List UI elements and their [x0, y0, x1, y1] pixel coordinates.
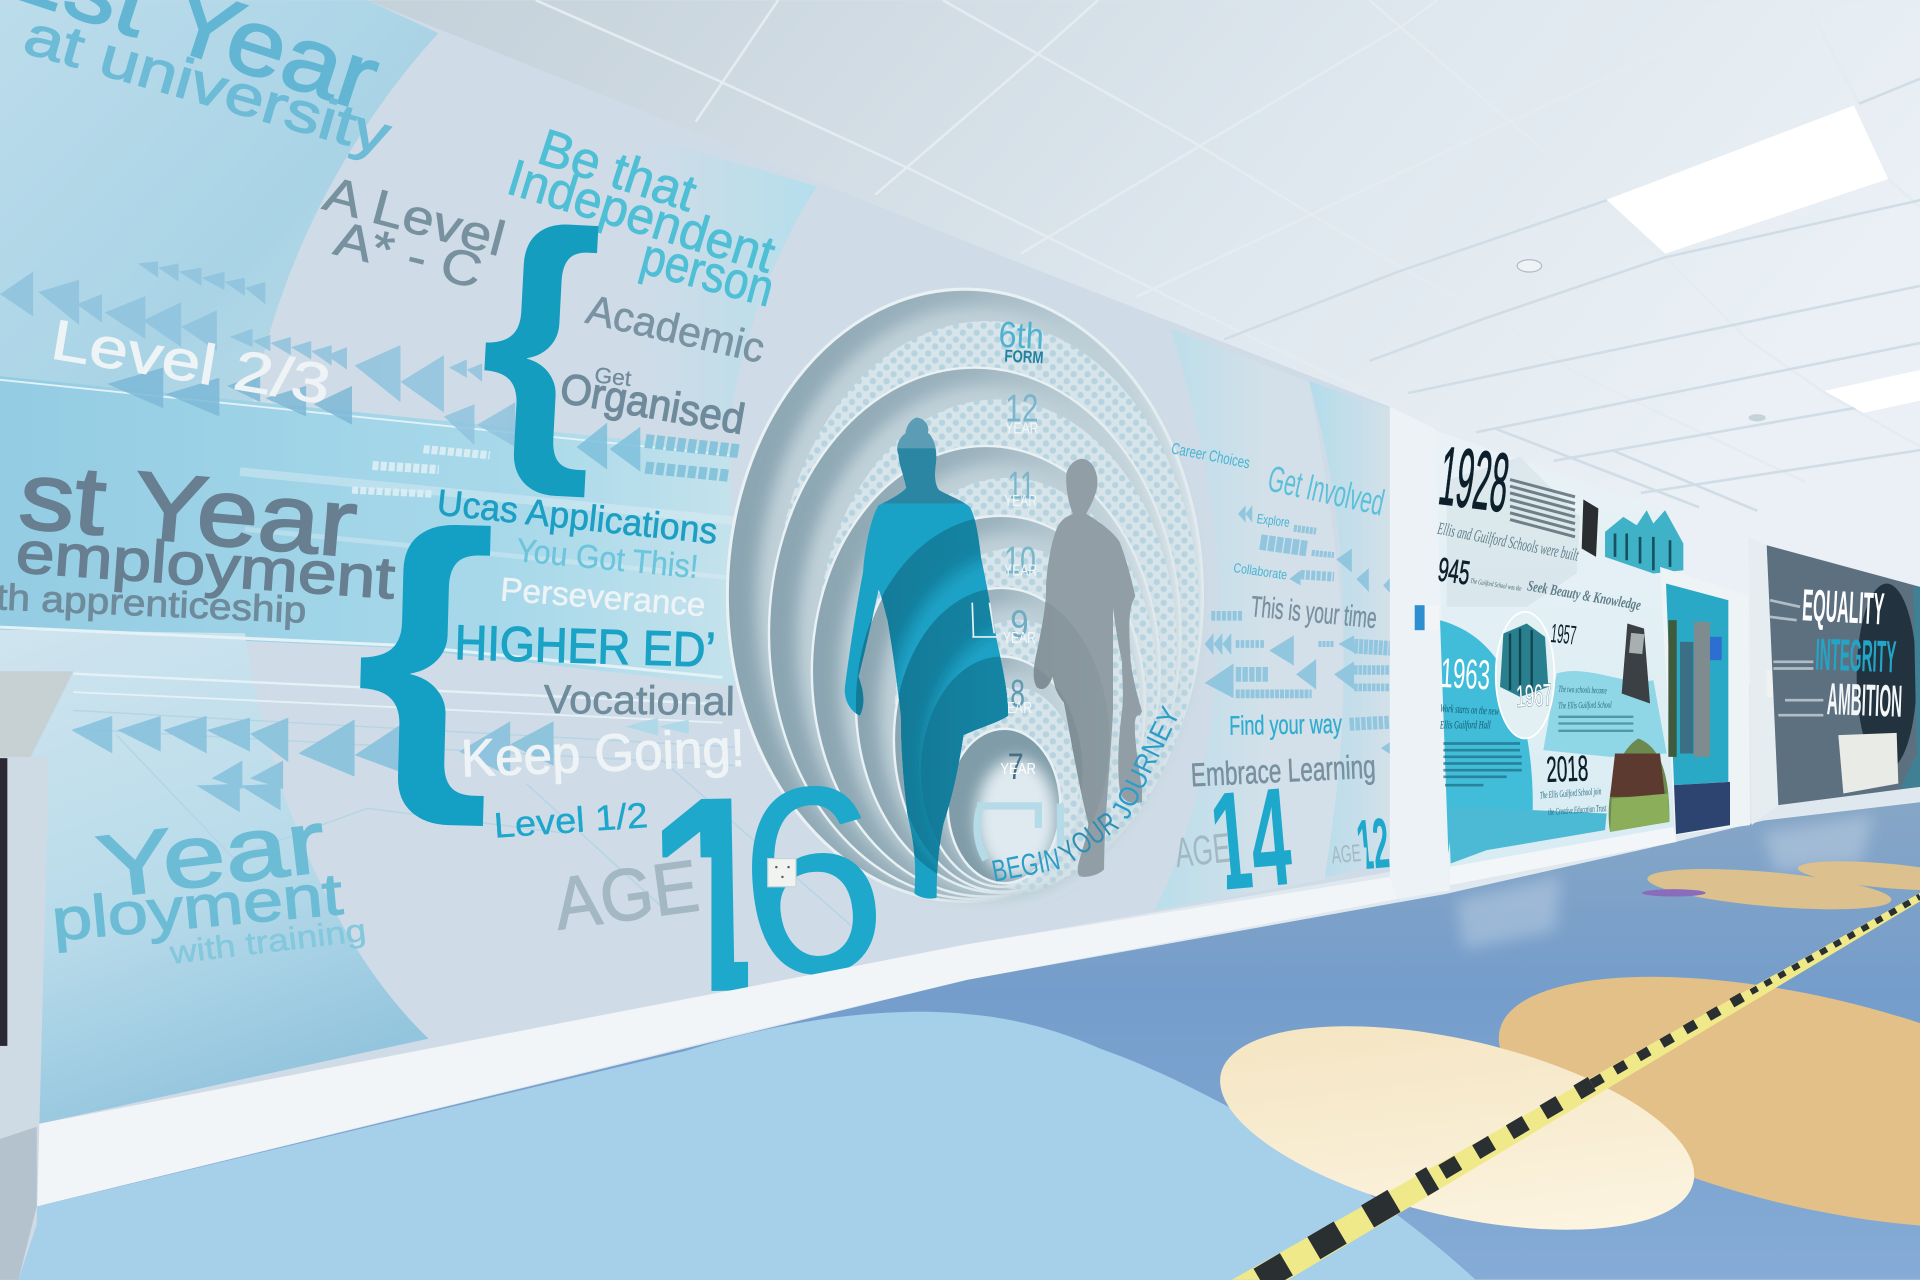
right blue band A [1155, 328, 1343, 910]
begin your journey curved label: BEGIN [989, 842, 1063, 889]
history wall panel [1435, 430, 1673, 867]
work starts caption [1439, 703, 1499, 732]
concentric journey circle [727, 289, 1202, 901]
level 2/3: Level 2/3 [47, 307, 335, 416]
academic: Academic [582, 285, 769, 372]
seek beauty motto: Seek Beauty & Knowledge [1526, 577, 1642, 614]
floor sticker [1642, 889, 1706, 897]
year 8 label: 8 [1010, 673, 1025, 716]
heading: year employment with training: Year [92, 791, 330, 917]
work starts caption: Ellis Guilford Hall [1439, 720, 1491, 732]
ring 3 year 11 [812, 446, 1160, 897]
main mural wall [0, 0, 1390, 1133]
year 7 label [1000, 746, 1036, 787]
A level grades: A* - C [329, 212, 487, 299]
ring 1 sixth form [727, 289, 1202, 901]
pillar between walls [1390, 407, 1450, 899]
history wall and far corridor: 1928 [1435, 429, 1514, 530]
joins trust caption: the Creative Education Trust [1548, 803, 1607, 818]
heading: year employment with training [49, 791, 368, 971]
age 12: AGE [1330, 840, 1362, 869]
heading: 1st year at university [0, 0, 398, 167]
ceiling sprinkler far [1749, 414, 1766, 421]
ghost letters in centre [977, 803, 1060, 860]
floor tan shape right [1476, 927, 1920, 1277]
two schools caption: The two schools became [1558, 685, 1607, 697]
dark circle on values wall [1857, 584, 1917, 770]
be that independent person [501, 117, 782, 318]
heading: 1st year employment with apprenticeship: employment [14, 520, 397, 611]
year 12 label: 12 [1005, 387, 1038, 430]
age 16: 6 [724, 724, 899, 1036]
6th form label: 6th [998, 314, 1045, 357]
wall socket [768, 859, 796, 887]
joins trust caption: The Ellis Guilford School join [1539, 786, 1602, 801]
level 1/2: Level 1/2 [492, 795, 649, 846]
door frame [1660, 567, 1750, 835]
begin your journey curved label [989, 702, 1186, 889]
year 10 label: YEAR [1004, 563, 1037, 580]
vocational: Vocational [544, 676, 735, 724]
year 9 label [1003, 603, 1036, 647]
year 9 label: 9 [1010, 603, 1029, 646]
two schools caption: The Ellis Guilford School [1558, 700, 1612, 712]
joins trust caption [1539, 786, 1607, 818]
perseverance: Perseverance [499, 571, 707, 624]
teal panel lower left [1440, 620, 1533, 854]
building engraving [1605, 510, 1683, 574]
find your way: Find your way [1229, 709, 1342, 741]
right mural chevrons [1205, 505, 1394, 757]
teal wash middle [1543, 671, 1667, 757]
work starts caption: Work starts on the new [1440, 703, 1499, 718]
year 11 label: YEAR [1004, 493, 1037, 510]
silhouette: man [1034, 458, 1142, 877]
floor reflections [1457, 814, 1873, 949]
year 8 label [998, 673, 1032, 717]
career choices: Career Choices [1170, 441, 1251, 472]
year 7 label: 7 [1008, 746, 1024, 787]
be that independent person: Be that [532, 117, 703, 222]
text: 12 [1354, 804, 1392, 886]
ring 5 year 9 [894, 588, 1109, 892]
be that independent person: Independent [501, 148, 782, 284]
ceiling light panel far [1824, 370, 1920, 413]
caption 1945: The Guilford School was the [1470, 576, 1523, 593]
A level grades [318, 167, 511, 299]
get involved: Get Involved [1264, 458, 1388, 523]
numerals fourteen: 14 [1205, 758, 1297, 920]
floor [0, 802, 1920, 1280]
get organised: Organised [557, 364, 748, 444]
dark door edge [0, 758, 7, 1046]
teal wash bottom [1448, 807, 1607, 864]
portrait photo [1582, 500, 1598, 557]
year 10 label: 10 [1004, 539, 1036, 582]
ring 4 year 10 [856, 516, 1145, 893]
lower left blue panel [0, 630, 429, 1133]
chevron arrows left lower [71, 716, 689, 812]
woman hanging strap detail [972, 603, 997, 637]
teal strip right [1900, 587, 1920, 789]
left mural text [0, 0, 899, 1052]
A level grades: A Level [318, 167, 511, 267]
circular building photo [1496, 612, 1554, 739]
silhouette: woman [844, 418, 1008, 899]
values wall small quotes [1770, 600, 1823, 715]
two schools caption [1558, 685, 1612, 712]
higher ed: HIGHER ED’ [454, 616, 716, 678]
blue panel top left [0, 0, 438, 466]
grey values wall [1767, 545, 1920, 805]
age 16: AGE [549, 844, 704, 945]
year 7 label: YEAR [1000, 761, 1036, 778]
year 8 label: YEAR [998, 700, 1032, 717]
history wall skirting [1450, 827, 1677, 885]
woman ring shading [856, 518, 1008, 874]
right blue band B [1309, 381, 1390, 877]
upper curly brace: { [473, 168, 608, 501]
door safety sign strip [1415, 605, 1439, 630]
door teal [1666, 584, 1728, 785]
ucas applications: Ucas Applications [435, 482, 719, 552]
year 9 label: YEAR [1003, 630, 1036, 647]
round photo of school [1609, 739, 1669, 832]
blue band behind independent person [637, 137, 817, 423]
skirting board main wall [37, 877, 1397, 1206]
6th form label: FORM [1004, 345, 1044, 367]
date 2018: 2018 [1546, 747, 1589, 790]
left column and trim [0, 671, 73, 1280]
date 1963: 1963 [1440, 649, 1491, 698]
floor beige ellipse far [1646, 861, 1893, 917]
keep going: Keep Going! [460, 719, 746, 789]
ghost map texture [1447, 457, 1580, 607]
ring 7 year 7 [948, 729, 1060, 883]
woman upper muted zone [897, 418, 936, 448]
paragraph 1928 [1510, 480, 1575, 537]
door windows [1668, 620, 1710, 757]
date 1967: 1967 [1515, 678, 1553, 714]
woman neck shading [882, 448, 965, 504]
get organised: Get [593, 362, 633, 391]
ceiling light panel near [1607, 106, 1888, 254]
date 1945: 945 [1436, 551, 1472, 593]
age 14: AGE [1173, 824, 1232, 876]
1967 paragraph [1558, 717, 1633, 731]
1963 paragraph [1443, 744, 1522, 785]
hazard tape [1232, 893, 1920, 1280]
radiator [1838, 733, 1898, 794]
explore: Explore [1256, 511, 1291, 530]
hand gel dispenser [1767, 670, 1778, 697]
age 16 [558, 786, 876, 991]
ring 2 year 12 [769, 368, 1180, 899]
year 11 label: 11 [1008, 465, 1035, 508]
age 14 [1176, 788, 1292, 890]
blue sign on door [1710, 637, 1722, 660]
history wall and far corridor [1415, 429, 1920, 885]
heading: 1st year employment with apprenticeship [0, 470, 396, 630]
numeral one: 1 [645, 738, 779, 1052]
heading: year employment with training: ployment [49, 862, 345, 954]
begin your journey curved label: JOURNEY [1105, 702, 1186, 823]
ceiling sprinkler [1517, 260, 1542, 272]
ceiling [0, 0, 1920, 686]
heading: year employment with training: with training [167, 912, 368, 971]
grey box top left [0, 671, 73, 757]
year labels in rings [998, 314, 1045, 787]
you got this: You Got This! [515, 532, 700, 586]
year 12 label [1005, 387, 1038, 438]
small chevron rows upper [352, 441, 740, 494]
lower curly brace: { [351, 465, 500, 830]
this is your time: This is your time [1250, 590, 1378, 635]
floor beige ellipse farthest [1797, 856, 1920, 896]
door navy kick plate [1674, 782, 1730, 834]
floor cream ellipse near [1201, 988, 1713, 1268]
be that independent person: person [635, 227, 780, 318]
floor light blue circle [18, 1012, 1476, 1280]
man ring shading [1034, 602, 1088, 830]
history wall and far corridor: 1957 [1549, 618, 1578, 650]
right mural text [1170, 441, 1392, 920]
equality integrity ambition values [1801, 579, 1903, 727]
horizontal stripe band [0, 376, 735, 686]
heading: 1st year at university: at university [18, 3, 398, 167]
ring 6 year 8 [921, 657, 1082, 887]
age 12 [1332, 818, 1390, 869]
year 12 label: YEAR [1005, 421, 1038, 438]
year 11 label [1004, 465, 1037, 510]
collaborate: Collaborate [1233, 560, 1288, 583]
second pillar [1748, 537, 1778, 825]
ellis and guilford heading: Ellis and Guilford Schools were built [1435, 519, 1581, 565]
begin your journey curved label: YOUR [1053, 805, 1125, 870]
embrace learning: Embrace Learning [1190, 749, 1376, 794]
chevron arrows left upper [0, 261, 640, 472]
newspaper clipping [1622, 624, 1650, 704]
